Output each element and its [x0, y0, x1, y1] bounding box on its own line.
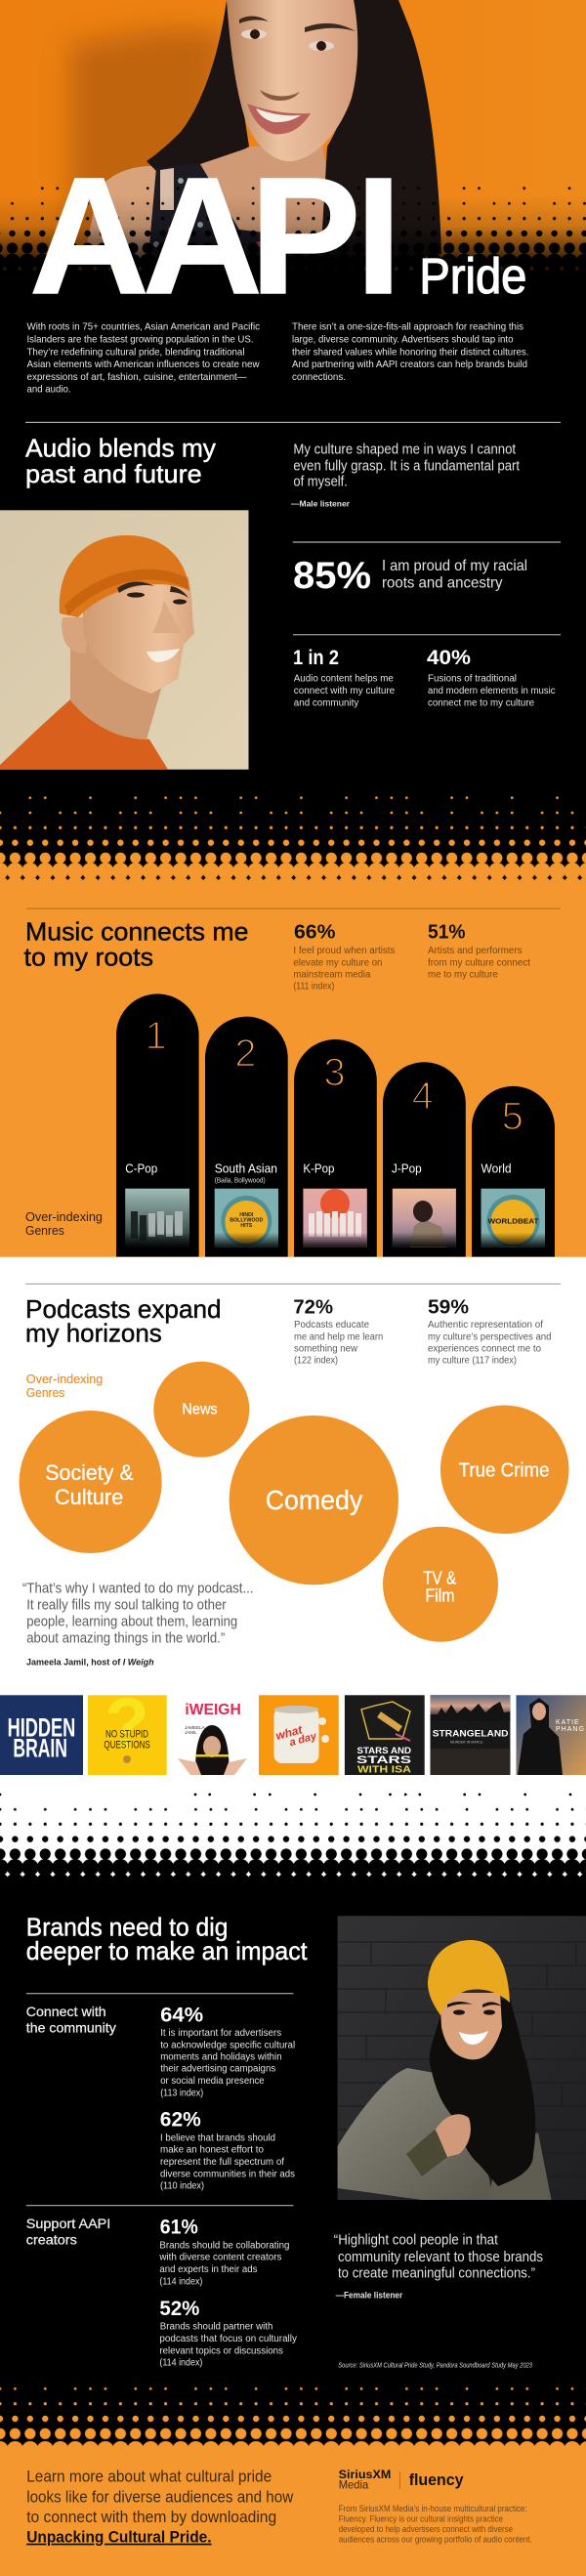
stat: 66%: 66% — [294, 921, 336, 944]
panel: brands — [0, 1882, 586, 2390]
bubble: TV & Film — [383, 1527, 498, 1642]
stat: 64%: to acknowledge specific cultural — [160, 2040, 295, 2050]
bubble: TV & Film: Film — [426, 1585, 455, 1605]
cover: What A Day: what — [274, 1722, 305, 1743]
stat: 61%: (114 index) — [159, 2276, 202, 2287]
quote: Jameela Jamil: It really fills my soul talking to other — [26, 1597, 227, 1614]
stat: 64%: 64% — [160, 2003, 203, 2026]
quote: male listener — [291, 441, 521, 509]
stat: 66%: I feel proud when artists — [293, 946, 395, 956]
bubble: News: News — [182, 1401, 218, 1417]
quote: female listener: —Female listener — [336, 2291, 403, 2301]
pillar: 1 C-Pop: 1 — [145, 1014, 167, 1057]
cover: Hidden Brain: HIDDEN — [8, 1712, 75, 1742]
quote: male listener: of myself. — [293, 474, 348, 490]
bubble: True Crime — [440, 1405, 568, 1534]
cover: No Stupid Questions: ? — [105, 1683, 149, 1764]
cover: What A Day: a day — [288, 1730, 318, 1749]
pillar: 3 K-Pop: 3 — [323, 1051, 346, 1094]
heading: brands need to dig — [26, 1913, 308, 1965]
stat: 40%: connect me to my culture — [428, 697, 534, 708]
heading: brands need to dig: deeper to make an impact — [26, 1936, 308, 1965]
panel: podcasts — [0, 1284, 586, 1776]
stat: 52% — [159, 2297, 297, 2368]
cover: Stars and Stars with Isa: STARS — [356, 1754, 411, 1766]
quote: female listener — [334, 2232, 543, 2301]
text block: intro left: With roots in 75+ countries, Asian American and Pacific — [27, 320, 260, 332]
stat: 59%: 59% — [428, 1295, 469, 1318]
cover: Katie Phang Show: PHANG — [556, 1726, 585, 1733]
bubble: TV & Film: TV & — [423, 1569, 456, 1588]
pillar: 3 K-Pop: K-Pop — [303, 1161, 334, 1176]
stat: 52%: Brands should partner with — [160, 2322, 272, 2333]
panel: hero — [0, 0, 586, 329]
title: AAPI Pride: Pride — [419, 248, 526, 304]
subheading: support AAPI creators — [26, 2216, 110, 2247]
stat: 72%: something new — [294, 1344, 358, 1355]
photo: man in orange beanie — [0, 510, 248, 770]
stat: 72% — [293, 1295, 383, 1367]
cover: Hidden Brain — [0, 1695, 83, 1775]
source note: Source: SiriusXM Cultural Pride Study, Pandora Soundboard Study May 2023 — [338, 2362, 532, 2369]
text block: about fluency: audiences across our growing portfolio of audio content. — [339, 2534, 532, 2544]
label: over-indexing genres: Genres — [25, 1224, 64, 1238]
pillar: 2 South Asian: 2 — [234, 1033, 257, 1076]
stat: 51% — [428, 921, 530, 981]
stat: 64%: their advertising campaigns — [160, 2064, 275, 2075]
stat: 66%: mainstream media — [293, 970, 371, 981]
quote: Jameela Jamil: people, learning about them, learning — [26, 1614, 237, 1630]
cover: Stars and Stars with Isa: WITH ISA — [357, 1764, 411, 1776]
logo: SiriusXM Media: Media — [339, 2478, 369, 2492]
stat: 1 in 2: connect with my culture — [294, 686, 396, 697]
cover: Strangeland: STRANGELAND — [433, 1728, 509, 1739]
stat: 64%: It is important for advertisers — [160, 2028, 281, 2039]
text block: intro right: connections. — [292, 371, 346, 383]
pillar: 2 South Asian: HITS — [240, 1223, 253, 1229]
stat: 40%: 40% — [427, 647, 471, 669]
panel: music — [23, 908, 561, 1257]
logo: SiriusXM Media — [339, 2470, 391, 2492]
stat: 1 in 2 — [293, 647, 396, 708]
cover: No Stupid Questions — [88, 1683, 167, 1775]
text block: about fluency — [339, 2504, 532, 2544]
bubble: Society & Culture: Society & — [45, 1460, 134, 1485]
bubble: Society & Culture: Culture — [55, 1485, 123, 1509]
text block: learn more: Learn more about what cultural pride — [26, 2468, 272, 2486]
panel: audio blends — [0, 424, 586, 770]
bubble: News — [153, 1362, 249, 1457]
pillar: 4 J-Pop: J-Pop — [392, 1161, 422, 1176]
stat: 72%: me and help me learn — [294, 1331, 383, 1342]
pillar: 4 J-Pop: 4 — [412, 1075, 434, 1118]
stat: 40%: Fusions of traditional — [428, 673, 517, 684]
text block: intro right — [292, 320, 529, 383]
text block: intro left — [27, 320, 260, 396]
text block: intro left: Asian elements with American influences to create new — [27, 359, 260, 370]
stat: 62%: represent the full spectrum of — [160, 2157, 284, 2168]
panel: call to action — [0, 2447, 586, 2576]
stat: 85%: 85% — [293, 555, 371, 597]
pillar: 5 World: World — [481, 1161, 512, 1176]
text block: intro right: And partnering with AAPI creators can help brands build — [292, 359, 527, 370]
stat: 52%: 52% — [159, 2297, 199, 2320]
stat: 62%: diverse communities in their ads — [160, 2169, 295, 2179]
text block: learn more: Unpacking Cultural Pride. — [26, 2528, 212, 2547]
text block: about fluency: From SiriusXM Media’s in-house multicultural practice: — [339, 2504, 527, 2513]
bubble: True Crime: True Crime — [459, 1460, 550, 1482]
heading: music connects — [23, 917, 248, 971]
cover: I Weigh: iWEIGH — [185, 1702, 241, 1718]
label: over-indexing genres — [26, 1372, 103, 1400]
cover: Katie Phang Show — [516, 1695, 586, 1775]
heading: audio blends — [25, 434, 216, 488]
stat: 85%: I am proud of my racial — [382, 558, 527, 574]
bubble: Comedy — [230, 1415, 398, 1584]
heading: podcasts expand: Podcasts expand — [25, 1294, 222, 1324]
stat: 61%: Brands should be collaborating — [159, 2240, 289, 2251]
subheading: connect with the community — [26, 2004, 116, 2035]
stat: 72%: (122 index) — [294, 1356, 338, 1367]
stat: 59% — [428, 1295, 551, 1367]
stat: 61%: and experts in their ads — [159, 2264, 257, 2275]
stat: 64%: (113 index) — [160, 2088, 203, 2098]
stat: 51%: from my culture connect — [428, 957, 530, 968]
stat: 1 in 2: 1 in 2 — [293, 647, 339, 669]
pillar: 2 South Asian: BOLLYWOOD — [230, 1217, 263, 1223]
stat: 59%: Authentic representation of — [428, 1320, 543, 1330]
text block: learn more: looks like for diverse audiences and how — [26, 2487, 294, 2506]
pillar: 3 K-Pop — [294, 1039, 377, 1257]
pillar: 4 J-Pop — [383, 1062, 466, 1257]
subheading: support AAPI creators: creators — [26, 2231, 77, 2247]
text block: intro right: their shared values while honoring their distinct cultures. — [292, 346, 529, 358]
stat: 85% — [293, 555, 527, 597]
pillar: 5 World — [472, 1086, 555, 1257]
podcast covers row — [0, 1683, 586, 1776]
stat: 66%: (111 index) — [293, 982, 334, 992]
label: over-indexing genres: Genres — [26, 1386, 64, 1400]
stat: 66%: elevate my culture on — [293, 957, 382, 968]
stat: 59%: experiences connect me to — [428, 1344, 541, 1355]
stat: 72%: 72% — [293, 1295, 333, 1318]
quote: Jameela Jamil: about amazing things in the world.” — [26, 1630, 225, 1647]
stat: 85%: roots and ancestry — [382, 574, 502, 591]
stat: 40% — [427, 647, 555, 708]
stat: 52%: podcasts that focus on culturally — [159, 2334, 297, 2344]
text block: intro left: They’re redefining cultural pride, blending traditional — [27, 346, 244, 358]
text block: intro left: and audio. — [27, 384, 70, 396]
pillar: 2 South Asian: South Asian — [215, 1161, 277, 1176]
cover: I Weigh — [171, 1695, 254, 1775]
cover: Strangeland — [430, 1695, 510, 1775]
text block: intro right: large, diverse community. Advertisers should tap into — [292, 333, 514, 345]
pillar: 5 World: 5 — [502, 1095, 523, 1138]
logo: fluency: fluency — [409, 2470, 464, 2489]
stat: 62% — [160, 2108, 295, 2192]
stat: 40%: and modern elements in music — [428, 686, 555, 697]
cover: Hidden Brain: BRAIN — [13, 1733, 67, 1762]
logo: SiriusXM Media: SiriusXM — [339, 2470, 391, 2481]
stat: 51%: 51% — [428, 921, 465, 944]
stat: 64%: or social media presence — [160, 2076, 265, 2087]
stat: 66% — [293, 921, 395, 992]
text block: learn more — [26, 2468, 294, 2547]
stat: 62%: make an honest effort to — [160, 2145, 264, 2156]
text block: learn more: to connect with them by downloading — [26, 2508, 276, 2526]
quote: Jameela Jamil — [22, 1581, 254, 1668]
title: AAPI Pride: AAPI — [29, 144, 401, 329]
quote: male listener: My culture shaped me in ways I cannot — [293, 441, 517, 457]
cover: I Weigh: JAMIL — [185, 1730, 197, 1735]
photo: woman in yellow beanie — [338, 1916, 586, 2200]
cover: Stars and Stars with Isa — [345, 1695, 425, 1776]
pillar: 1 C-Pop: C-Pop — [125, 1161, 157, 1176]
cover: No Stupid Questions: QUESTIONS — [104, 1739, 150, 1751]
stat: 64%: moments and holidays within — [160, 2052, 282, 2063]
stat: 51%: Artists and performers — [428, 946, 522, 956]
quote: female listener: to create meaningful connections.” — [338, 2264, 535, 2281]
bubble: Comedy: Comedy — [266, 1485, 362, 1515]
quote: male listener: even fully grasp. It is a fundamental part — [293, 457, 521, 474]
heading: brands need to dig: Brands need to dig — [26, 1913, 228, 1942]
bubble: Society & Culture — [20, 1411, 162, 1553]
stat: 61%: 61% — [160, 2216, 198, 2239]
stat: 1 in 2: Audio content helps me — [294, 673, 394, 684]
pillar: 1 C-Pop — [116, 993, 199, 1257]
stat: 59%: my culture (117 index) — [428, 1356, 517, 1367]
heading: music connects: to my roots — [23, 942, 153, 971]
quote: male listener: —Male listener — [291, 499, 351, 509]
pillar: 2 South Asian: (Baila, Bollywood) — [215, 1178, 266, 1185]
pillar: 2 South Asian: HINDI — [239, 1212, 254, 1218]
stat: 62%: 62% — [160, 2108, 201, 2132]
heading: podcasts expand — [25, 1294, 222, 1347]
text block: about fluency: Fluency. Fluency is our cultural insights practice — [339, 2513, 503, 2523]
stat: 1 in 2: and community — [294, 697, 358, 708]
stat: 52%: relevant topics or discussions — [159, 2345, 283, 2356]
heading: audio blends: Audio blends my — [25, 434, 216, 463]
cover: What A Day — [259, 1695, 339, 1775]
text block: intro left: Islanders are the fastest growing population in the US. — [27, 333, 254, 345]
text block: intro left: expressions of art, fashion, cuisine, entertainment— — [27, 371, 247, 383]
quote: female listener: community relevant to those brands — [338, 2249, 543, 2265]
cover: No Stupid Questions: NO STUPID — [105, 1728, 148, 1740]
heading: podcasts expand: my horizons — [25, 1318, 162, 1347]
stat: 64% — [160, 2003, 295, 2098]
heading: audio blends: past and future — [25, 459, 202, 488]
subheading: connect with the community: Connect with — [26, 2004, 106, 2019]
pillar: 2 South Asian — [205, 1017, 288, 1257]
text block: intro right: There isn’t a one-size-fits-all approach for reaching this — [292, 320, 523, 332]
subheading: support AAPI creators: Support AAPI — [26, 2216, 110, 2231]
stat: 52%: (114 index) — [159, 2357, 202, 2368]
pillar: 5 World: WORLDBEAT — [488, 1217, 539, 1226]
heading: music connects: Music connects me — [25, 917, 248, 947]
text block: about fluency: developed to help advertisers connect with diverse — [339, 2524, 513, 2534]
cover: Stars and Stars with Isa: STARS AND — [357, 1746, 411, 1756]
stat: 59%: my culture’s perspectives and — [428, 1331, 551, 1342]
cover: Strangeland: MURDER IN MAPLE — [450, 1741, 483, 1745]
stat: 61% — [158, 2216, 289, 2287]
label: over-indexing genres: Over-indexing — [26, 1372, 103, 1386]
quote: Jameela Jamil: Jameela Jamil, host of I Weigh — [26, 1658, 154, 1668]
stat: 62%: I believe that brands should — [160, 2133, 275, 2144]
subheading: connect with the community: the community — [26, 2019, 116, 2035]
photo: woman on orange wall — [70, 0, 441, 278]
quote: Jameela Jamil: “That’s why I wanted to do my podcast... — [22, 1581, 254, 1597]
stat: 61%: with diverse content creators — [158, 2253, 281, 2263]
label: over-indexing genres: Over-indexing — [25, 1210, 103, 1224]
cover: I Weigh: JAMEELA — [185, 1725, 205, 1730]
quote: female listener: “Highlight cool people in that — [334, 2232, 499, 2249]
label: over-indexing genres — [25, 1210, 103, 1238]
stat: 72%: Podcasts educate — [294, 1320, 369, 1330]
cover: Katie Phang Show: KATIE — [556, 1719, 580, 1726]
stat: 62%: (110 index) — [160, 2181, 204, 2192]
stat: 51%: me to my culture — [428, 970, 498, 981]
